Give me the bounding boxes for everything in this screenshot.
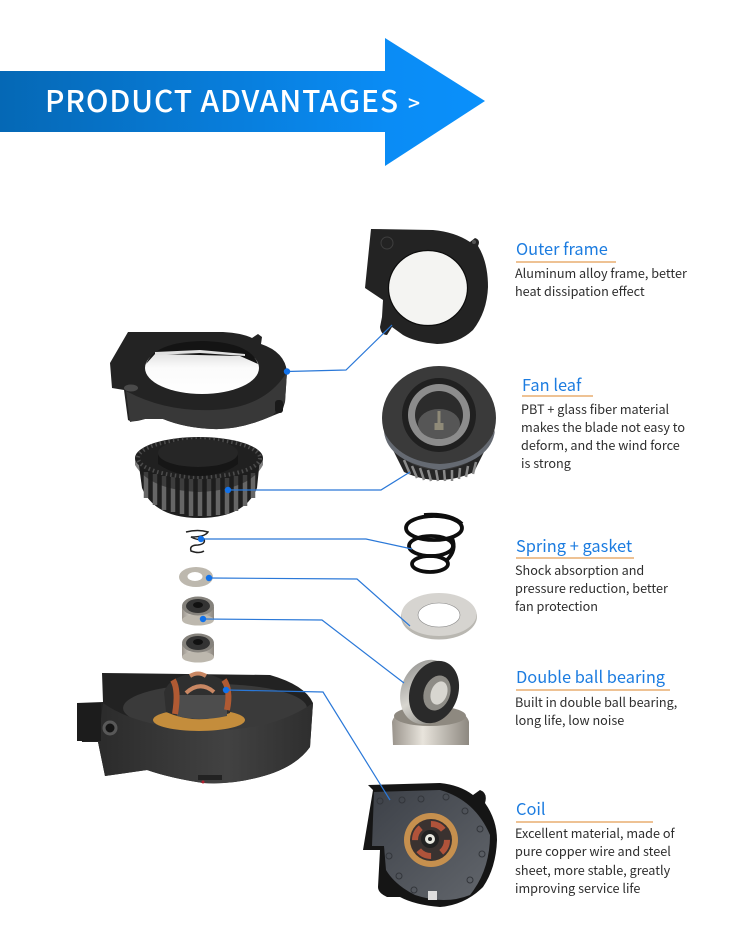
photo: coil bottom view <box>363 783 497 907</box>
photo: open housing with coil <box>77 673 313 784</box>
leader line: fan leaf <box>225 472 410 493</box>
text block: coil: pure copper wire and steel <box>515 841 671 860</box>
leader line: spring <box>198 536 412 549</box>
text block: spring and gasket <box>515 533 668 615</box>
text block: spring and gasket: Shock absorption and <box>515 560 644 579</box>
photo: spring <box>406 515 462 572</box>
text block: outer frame <box>515 236 687 300</box>
photo: small spring <box>186 530 208 552</box>
photo: small bearing lower <box>182 634 214 662</box>
text block: fan leaf: is strong <box>521 453 571 472</box>
icon: housing rivets <box>377 794 485 893</box>
photo: fan leaf exploded view <box>135 437 263 518</box>
text block: fan leaf: deform, and the wind force <box>521 435 680 454</box>
text block: double ball bearing: Built in double ball bearing, <box>515 692 677 711</box>
text block: coil <box>515 796 676 897</box>
text block: coil: Coil <box>516 796 546 820</box>
text block: outer frame: Aluminum alloy frame, better <box>515 263 687 282</box>
icon: stator <box>164 673 232 719</box>
text block: fan leaf: Fan leaf <box>522 372 582 396</box>
text block: coil: improving service life <box>515 878 640 897</box>
photo: fan leaf <box>382 366 496 481</box>
text block: spring and gasket: Spring + gasket <box>516 533 632 557</box>
text block: double ball bearing: long life, low noise <box>515 710 624 729</box>
photo: small gasket <box>179 567 213 587</box>
icon: gold circuit board <box>153 709 245 731</box>
photo: outer frame <box>365 229 488 344</box>
text block: double ball bearing: Double ball bearing <box>516 664 665 688</box>
title: PRODUCT ADVANTAGES <box>45 77 399 121</box>
text block: spring and gasket: fan protection <box>515 596 598 615</box>
text block: fan leaf <box>521 372 685 472</box>
text block: outer frame: Outer frame <box>516 236 608 260</box>
title: > <box>408 88 421 118</box>
leader line: gasket <box>206 575 410 626</box>
icon: copper coil windings <box>415 824 447 856</box>
photo: double ball bearing <box>391 652 469 745</box>
text block: outer frame: heat dissipation effect <box>515 281 645 300</box>
text block: spring and gasket: pressure reduction, better <box>515 578 668 597</box>
leader line: coil <box>223 687 390 800</box>
photo: small bearing upper <box>182 596 214 626</box>
leader line: bearing <box>200 616 404 683</box>
icon: shaft <box>434 411 444 430</box>
text block: coil: Excellent material, made of <box>515 823 676 842</box>
photo: gasket <box>401 593 477 640</box>
text block: double ball bearing <box>515 664 677 729</box>
text block: fan leaf: PBT + glass fiber material <box>521 399 670 418</box>
photo: outer frame exploded view <box>110 332 287 429</box>
banner arrow: product advantages <box>0 38 485 166</box>
leader line: outer frame <box>284 325 392 375</box>
text block: coil: sheet, more stable, greatly <box>515 860 671 879</box>
text block: fan leaf: makes the blade not easy to <box>521 417 685 436</box>
